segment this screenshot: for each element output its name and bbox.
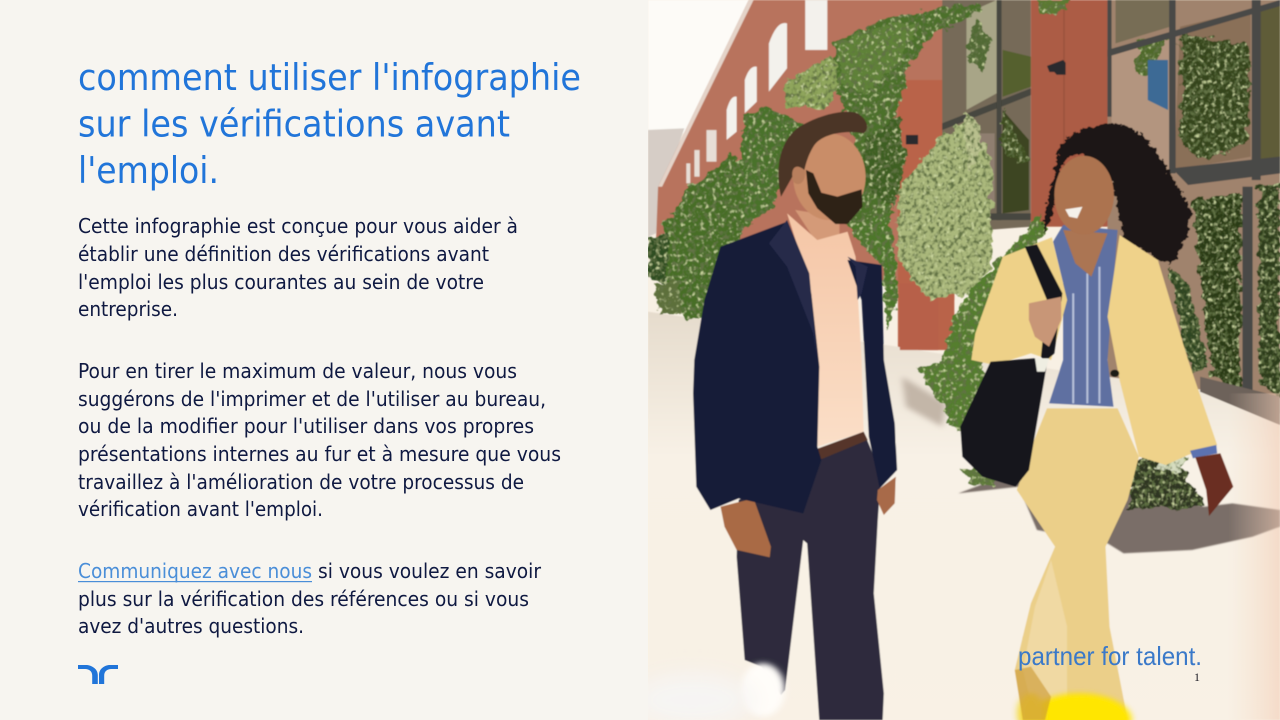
text block: usage suggestions: travaillez à l'amélioration de votre processus de bbox=[78, 470, 524, 494]
text block: contact bbox=[78, 559, 542, 638]
bag bbox=[960, 358, 1047, 487]
title: sur les vérifications avant bbox=[78, 102, 510, 146]
trousers bbox=[1015, 408, 1139, 720]
sky and background bbox=[648, 0, 748, 134]
text block: introduction: entreprise. bbox=[78, 297, 178, 321]
text block: usage suggestions: vérification avant l'emploi. bbox=[78, 497, 323, 521]
text block: contact: plus sur la vérification des références ou si vous bbox=[78, 587, 529, 611]
brick base bbox=[899, 346, 938, 351]
text block: contact: avez d'autres questions. bbox=[78, 614, 304, 638]
text block: introduction: Cette infographie est conçue pour vous aider à bbox=[78, 214, 518, 238]
ear bbox=[793, 166, 805, 184]
jacket bbox=[693, 222, 897, 513]
security camera bbox=[1047, 60, 1066, 75]
page number: 1 bbox=[1194, 670, 1200, 684]
brick wall beside glass bbox=[898, 80, 954, 350]
hair bbox=[1044, 124, 1191, 265]
background panel bbox=[0, 0, 648, 720]
hair bbox=[778, 112, 867, 197]
blouse bbox=[1049, 225, 1118, 407]
smile bbox=[1065, 207, 1082, 218]
right glazing bbox=[1107, 0, 1280, 413]
text block: contact: si vous voulez en savoir bbox=[318, 559, 542, 583]
shirt bbox=[787, 213, 864, 447]
text block: introduction: établir une définition des vérifications avant bbox=[78, 242, 489, 266]
ground bbox=[648, 312, 1280, 720]
title: comment utiliser l'infographie bbox=[78, 56, 581, 99]
glows bbox=[1027, 693, 1132, 720]
trousers bbox=[737, 437, 884, 720]
hands bbox=[721, 498, 771, 557]
brick pillar bbox=[1031, 0, 1110, 227]
left building bbox=[656, 0, 954, 300]
face bbox=[1054, 156, 1114, 234]
link: contact us: Communiquez avec nous bbox=[78, 559, 312, 583]
text block: introduction: l'emploi les plus courantes au sein de votre bbox=[78, 270, 484, 294]
hand bbox=[1029, 297, 1061, 347]
foliage bbox=[648, 0, 1208, 430]
middle glazing bbox=[942, 0, 1031, 233]
beard bbox=[806, 170, 862, 224]
bush behind woman bbox=[959, 456, 1206, 512]
title: l'emploi. bbox=[78, 149, 219, 192]
tagline: partner for talent: partner for talent. bbox=[1018, 641, 1202, 671]
jacket bbox=[971, 237, 1067, 365]
text block: usage suggestions: présentations internes au fur et à mesure que vous bbox=[78, 442, 561, 466]
text block: usage suggestions: ou de la modifier pour l'utiliser dans vos propres bbox=[78, 414, 534, 438]
face bbox=[793, 133, 866, 220]
neck bbox=[795, 210, 840, 240]
text block: usage suggestions bbox=[78, 359, 561, 521]
strap bbox=[1025, 244, 1062, 362]
cuff and hand bbox=[1190, 445, 1217, 458]
icon: company logo bbox=[78, 665, 118, 684]
text block: introduction bbox=[78, 214, 518, 321]
belt bbox=[814, 432, 868, 462]
ground shadow bbox=[958, 473, 1280, 553]
text block: usage suggestions: Pour en tirer le maximum de valeur, nous vous bbox=[78, 359, 517, 383]
text block: usage suggestions: suggérons de l'imprimer et de l'utiliser au bureau, bbox=[78, 387, 546, 411]
photo: two colleagues walking outside a brick building bbox=[632, 0, 1280, 720]
title bbox=[78, 56, 581, 192]
